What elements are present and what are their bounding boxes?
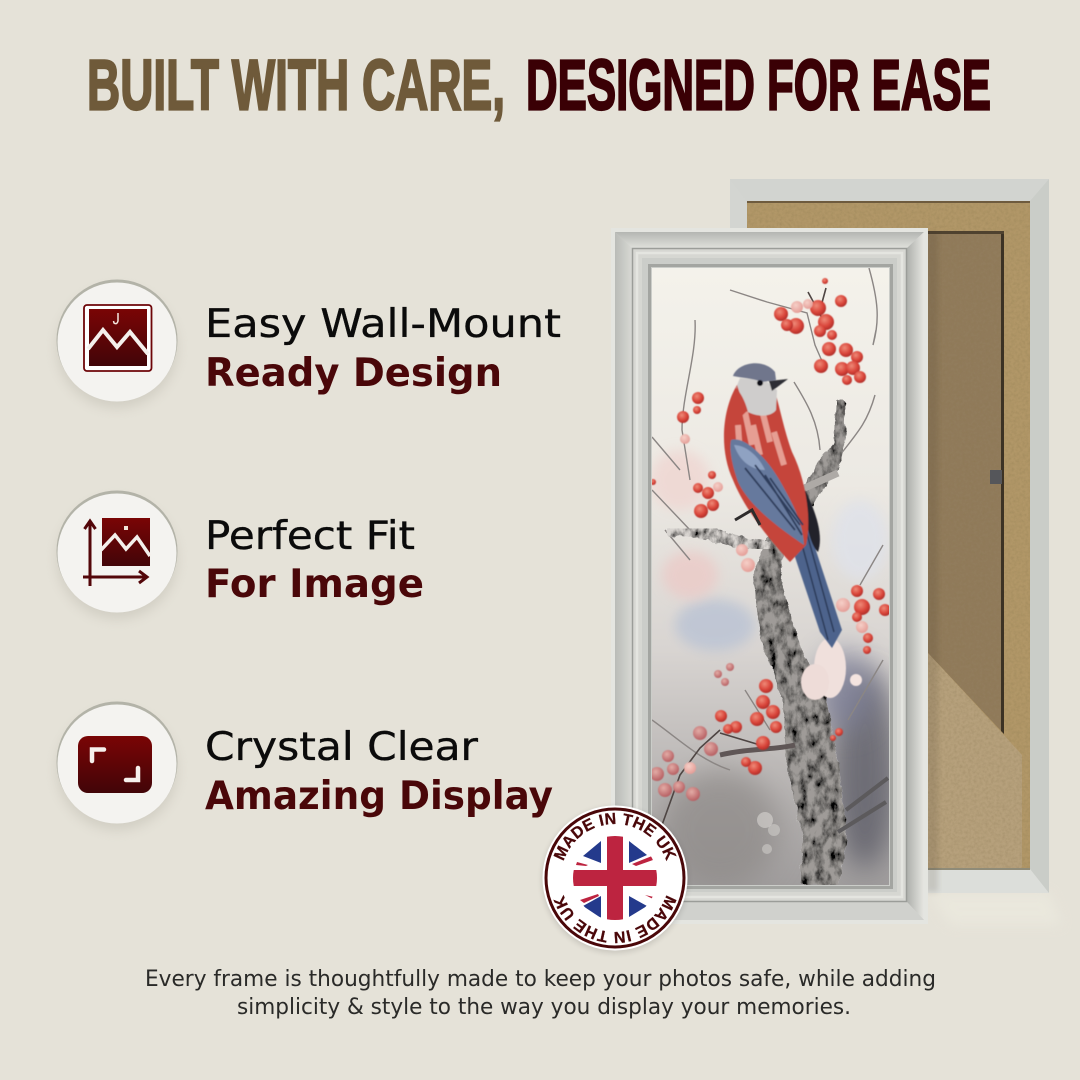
painting: bird on blossom branch bbox=[650, 268, 899, 890]
icon: framed mountain with hook bbox=[84, 305, 152, 371]
text: perfect fit: For Image bbox=[205, 562, 424, 607]
text: crystal clear: Amazing Display bbox=[205, 774, 553, 819]
icon: image with dimension arrows bbox=[83, 518, 150, 586]
text: perfect fit: Perfect Fit bbox=[205, 514, 415, 559]
bird bbox=[724, 363, 842, 648]
title: BUILT WITH CARE, bbox=[87, 46, 505, 126]
badge lettering bbox=[553, 812, 677, 944]
pale blossoms bbox=[801, 638, 862, 700]
twigs bbox=[652, 268, 883, 770]
badge lettering: MADE IN THE UK bbox=[553, 812, 677, 862]
caption: Every frame is thoughtfully made to keep your photos safe, while adding bbox=[145, 967, 936, 992]
floor shadow bbox=[930, 893, 1062, 925]
back of frame bbox=[730, 179, 1049, 893]
icon: expand display bbox=[78, 736, 152, 793]
front frame bbox=[611, 228, 928, 924]
text: easy wall-mount: Ready Design bbox=[205, 351, 502, 396]
text: easy wall-mount: Easy Wall-Mount bbox=[205, 302, 561, 347]
inner recess bbox=[928, 231, 1004, 734]
badge: made in the uk bbox=[540, 806, 689, 954]
caption bbox=[145, 967, 936, 1020]
shadow of front frame bbox=[926, 232, 938, 892]
text: crystal clear bbox=[205, 725, 553, 819]
badge lettering: MADE IN THE UK bbox=[553, 894, 677, 944]
caption: simplicity & style to the way you display your memories. bbox=[237, 995, 851, 1020]
text: perfect fit bbox=[205, 514, 424, 607]
trunk bbox=[753, 400, 847, 885]
side branches bbox=[838, 778, 888, 832]
feature: crystal clear bbox=[56, 702, 553, 830]
watercolour wash bbox=[650, 268, 899, 890]
union flag bbox=[573, 836, 657, 920]
feature: perfect fit bbox=[56, 490, 424, 619]
mdf backing board bbox=[747, 201, 1030, 869]
berries bbox=[650, 278, 891, 775]
pale berries bbox=[650, 299, 868, 801]
feature: easy wall-mount bbox=[56, 280, 561, 408]
bird feet bbox=[735, 510, 760, 525]
folding stand flap bbox=[928, 653, 1022, 868]
text: crystal clear: Crystal Clear bbox=[205, 725, 479, 770]
text: easy wall-mount bbox=[205, 302, 561, 396]
hanging clip bbox=[990, 470, 1002, 484]
